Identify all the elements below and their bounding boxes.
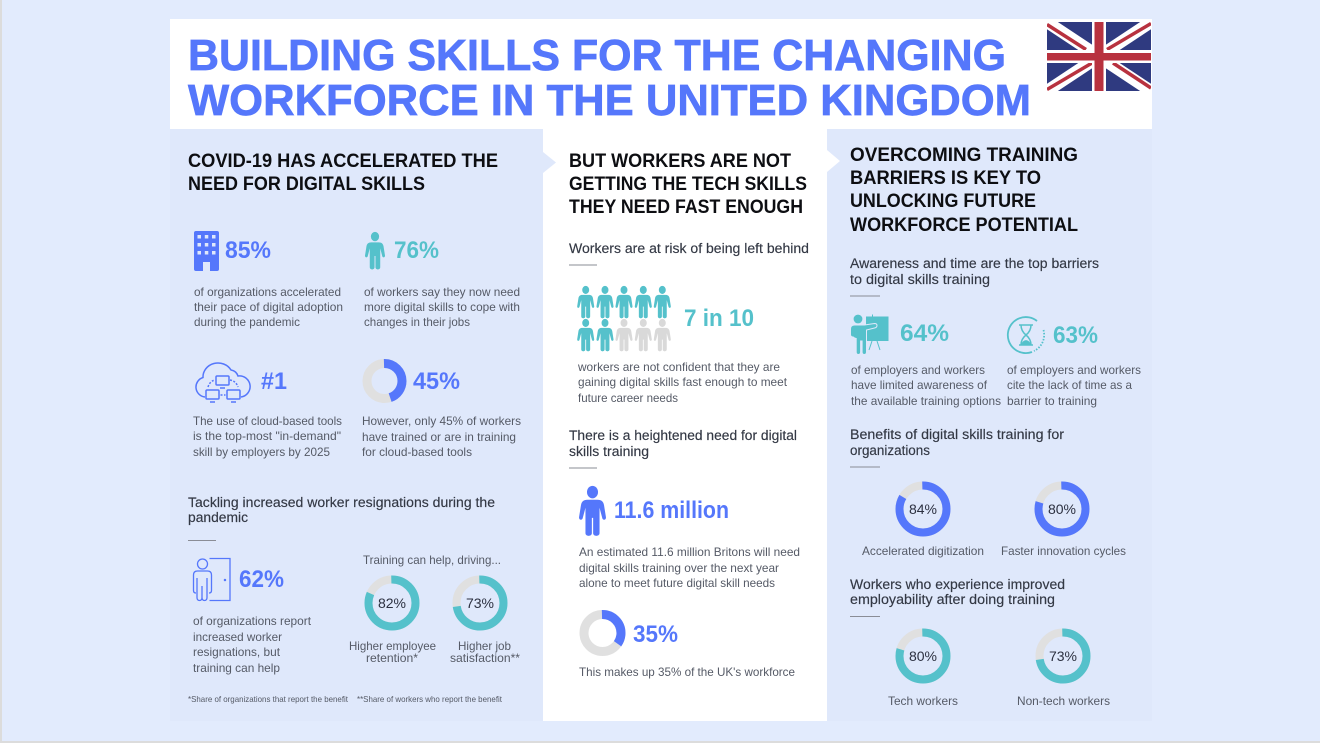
stat: #1 cloud tools bbox=[193, 363, 342, 459]
stat: 85% organizations: during the pandemic bbox=[194, 315, 300, 329]
stat: 85% organizations: 85% bbox=[225, 237, 271, 264]
donut: 73% satisfaction: 73% bbox=[466, 595, 494, 611]
stat: 63% time bbox=[1007, 317, 1141, 408]
stat: 35% of workforce: 35% bbox=[633, 621, 678, 648]
subheading: top barriers bbox=[850, 256, 1099, 287]
donut: 82% retention bbox=[349, 580, 436, 665]
heading: tackling resignations: pandemic bbox=[188, 510, 248, 525]
subheading: improved employability bbox=[850, 577, 1065, 607]
heading: tackling resignations bbox=[188, 495, 495, 525]
heading: right column: BARRIERS IS KEY TO bbox=[850, 168, 1041, 189]
stat: 76% workers bbox=[364, 232, 520, 329]
donut: 82% retention: Higher employee bbox=[349, 639, 436, 653]
heading: middle column: BUT WORKERS ARE NOT bbox=[569, 151, 791, 172]
heading: middle column: GETTING THE TECH SKILLS bbox=[569, 174, 807, 195]
donut: 82% retention: 82% bbox=[378, 595, 406, 611]
stat: #1 cloud tools: #1 bbox=[261, 368, 287, 395]
donut: 73% satisfaction: satisfaction** bbox=[450, 651, 520, 665]
stat: 64% awareness bbox=[850, 314, 1001, 408]
panel: covid accelerated heading: NEED FOR DIGITAL SKILLS bbox=[188, 174, 425, 195]
stat: 11.6 million: alone to meet future digital skill needs bbox=[579, 576, 775, 590]
stat: 76% workers: more digital skills to cope with bbox=[364, 300, 520, 314]
stat: 62% resignations bbox=[193, 558, 312, 675]
stat: 64% awareness: have limited awareness of bbox=[851, 378, 988, 392]
subheading: improved employability: Workers who experience improved bbox=[850, 577, 1065, 592]
stat: 76% workers: 76% bbox=[394, 237, 439, 264]
icon: person at door bbox=[194, 558, 230, 600]
donut: 80% tech workers bbox=[888, 632, 958, 708]
stat: 7 in 10: gaining digital skills fast enough to meet bbox=[578, 375, 788, 389]
icon: person bbox=[579, 486, 606, 536]
icon: presenter at board bbox=[850, 314, 888, 354]
stat: 45% cloud training: 45% bbox=[413, 368, 460, 395]
subheading: heightened need: skills training bbox=[569, 444, 649, 459]
donut: 80% tech workers: Tech workers bbox=[888, 694, 958, 708]
text: training can help: Training can help, driving... bbox=[363, 553, 501, 567]
icon: cloud network bbox=[196, 363, 250, 402]
stat: 63% time: 63% bbox=[1053, 322, 1098, 349]
stat: 85% organizations bbox=[194, 231, 343, 329]
panel: covid accelerated heading bbox=[188, 151, 498, 195]
subheading: top barriers: to digital skills training bbox=[850, 272, 990, 287]
stat: 62% resignations: training can help bbox=[193, 661, 280, 675]
stat: 63% time: barrier to training bbox=[1007, 394, 1097, 408]
donut: 80% innovation: 80% bbox=[1048, 501, 1076, 517]
subheading: improved employability: employability after doing training bbox=[850, 592, 1055, 607]
stat: 45% cloud training: have trained or are in training bbox=[362, 430, 516, 444]
stat: 11.6 million: An estimated 11.6 million Britons will need bbox=[579, 545, 800, 559]
stat: 64% awareness: 64% bbox=[900, 320, 949, 347]
stat: 35% of workforce: This makes up 35% of the UK's workforce bbox=[579, 665, 795, 679]
stat: 64% awareness: the available training options bbox=[851, 394, 1001, 408]
donut: 80% innovation bbox=[1001, 486, 1126, 558]
stat: 62% resignations: 62% bbox=[239, 566, 284, 593]
stat: 62% resignations: increased worker bbox=[193, 630, 282, 644]
donut: 82% retention: retention* bbox=[366, 651, 418, 665]
stat: 35% of workforce bbox=[579, 614, 795, 679]
heading: right column: WORKFORCE POTENTIAL bbox=[850, 215, 1078, 236]
subheading: benefits for organizations bbox=[850, 427, 1065, 458]
footnotes bbox=[188, 694, 503, 704]
stat: 45% cloud training: However, only 45% of workers bbox=[362, 414, 521, 428]
stat: 63% time: of employers and workers bbox=[1007, 363, 1141, 377]
donut: 80% tech workers: 80% bbox=[909, 648, 937, 664]
stat: 45% cloud training: for cloud-based tools bbox=[362, 445, 472, 459]
title banner: WORKFORCE IN THE UNITED KINGDOM bbox=[188, 76, 1031, 125]
stat: 7 in 10: 7 in 10 bbox=[684, 305, 754, 332]
stat: 7 in 10: future career needs bbox=[578, 391, 678, 405]
panel: covid accelerated heading: COVID-19 HAS ACCELERATED THE bbox=[188, 151, 498, 172]
stat: #1 cloud tools: skill by employers by 2025 bbox=[193, 445, 330, 459]
heading: right column: OVERCOMING TRAINING bbox=[850, 145, 1078, 166]
donut: 73% non-tech workers: Non-tech workers bbox=[1017, 694, 1110, 708]
donut: 80% innovation: Faster innovation cycles bbox=[1001, 544, 1126, 558]
stat: #1 cloud tools: is the top-most "in-demand" bbox=[193, 429, 341, 443]
stat: 45% cloud training bbox=[362, 364, 521, 459]
icon: building bbox=[194, 231, 219, 271]
panel: middle column bbox=[543, 129, 840, 721]
donut: 73% satisfaction bbox=[450, 580, 520, 665]
footnotes: **Share of workers who report the benefit bbox=[357, 694, 503, 704]
stat: 64% awareness: of employers and workers bbox=[851, 363, 985, 377]
subheading: heightened need: There is a heightened need for digital bbox=[569, 428, 797, 443]
stat: 11.6 million: digital skills training over the next year bbox=[579, 561, 779, 575]
stat: 11.6 million: 11.6 million bbox=[614, 497, 729, 524]
donut: 73% non-tech workers: 73% bbox=[1049, 648, 1077, 664]
subheading: benefits for organizations: Benefits of digital skills training for bbox=[850, 427, 1065, 442]
heading: middle column bbox=[569, 151, 807, 218]
icon: hourglass bbox=[1008, 317, 1044, 353]
subheading: risk of being left behind: Workers are at risk of being left behind bbox=[569, 241, 809, 256]
subheading: heightened need bbox=[569, 428, 797, 459]
subheading: benefits for organizations: organizations bbox=[850, 443, 930, 458]
donut: 35% bbox=[584, 614, 621, 652]
heading: tackling resignations: Tackling increased worker resignations during the bbox=[188, 495, 495, 510]
heading: right column: UNLOCKING FUTURE bbox=[850, 191, 1036, 212]
stat: 11.6 million bbox=[579, 486, 800, 590]
stat: 7 in 10: workers are not confident that they are bbox=[577, 360, 780, 374]
stat: 63% time: cite the lack of time as a bbox=[1007, 378, 1132, 392]
title banner: BUILDING SKILLS FOR THE CHANGING bbox=[188, 31, 1006, 80]
stat: 76% workers: of workers say they now need bbox=[364, 285, 520, 299]
donut: 73% non-tech workers bbox=[1017, 632, 1110, 708]
title banner bbox=[170, 19, 1152, 129]
icon: UK flag bbox=[1047, 22, 1151, 91]
heading: right column bbox=[850, 145, 1078, 236]
donut: 84% digitization: 84% bbox=[909, 501, 937, 517]
stat: 76% workers: changes in their jobs bbox=[364, 315, 470, 329]
subheading: top barriers: Awareness and time are the top barriers bbox=[850, 256, 1099, 271]
pictogram: 7 in 10 people bbox=[577, 286, 671, 351]
stat: 62% resignations: of organizations report bbox=[193, 614, 312, 628]
icon: person bbox=[365, 232, 385, 269]
footnotes: *Share of organizations that report the benefit bbox=[188, 694, 349, 704]
donut: 45% bbox=[367, 364, 402, 398]
stat: 7 in 10 bbox=[577, 305, 788, 405]
stat: 62% resignations: resignations, but bbox=[193, 645, 281, 659]
stat: 85% organizations: of organizations accelerated bbox=[194, 285, 341, 299]
donut: 84% digitization: Accelerated digitization bbox=[862, 544, 984, 558]
heading: middle column: THEY NEED FAST ENOUGH bbox=[569, 197, 803, 218]
stat: 85% organizations: their pace of digital adoption bbox=[194, 300, 343, 314]
donut: 73% satisfaction: Higher job bbox=[458, 639, 511, 653]
stat: #1 cloud tools: The use of cloud-based tools bbox=[193, 414, 342, 428]
donut: 84% digitization bbox=[862, 486, 984, 558]
